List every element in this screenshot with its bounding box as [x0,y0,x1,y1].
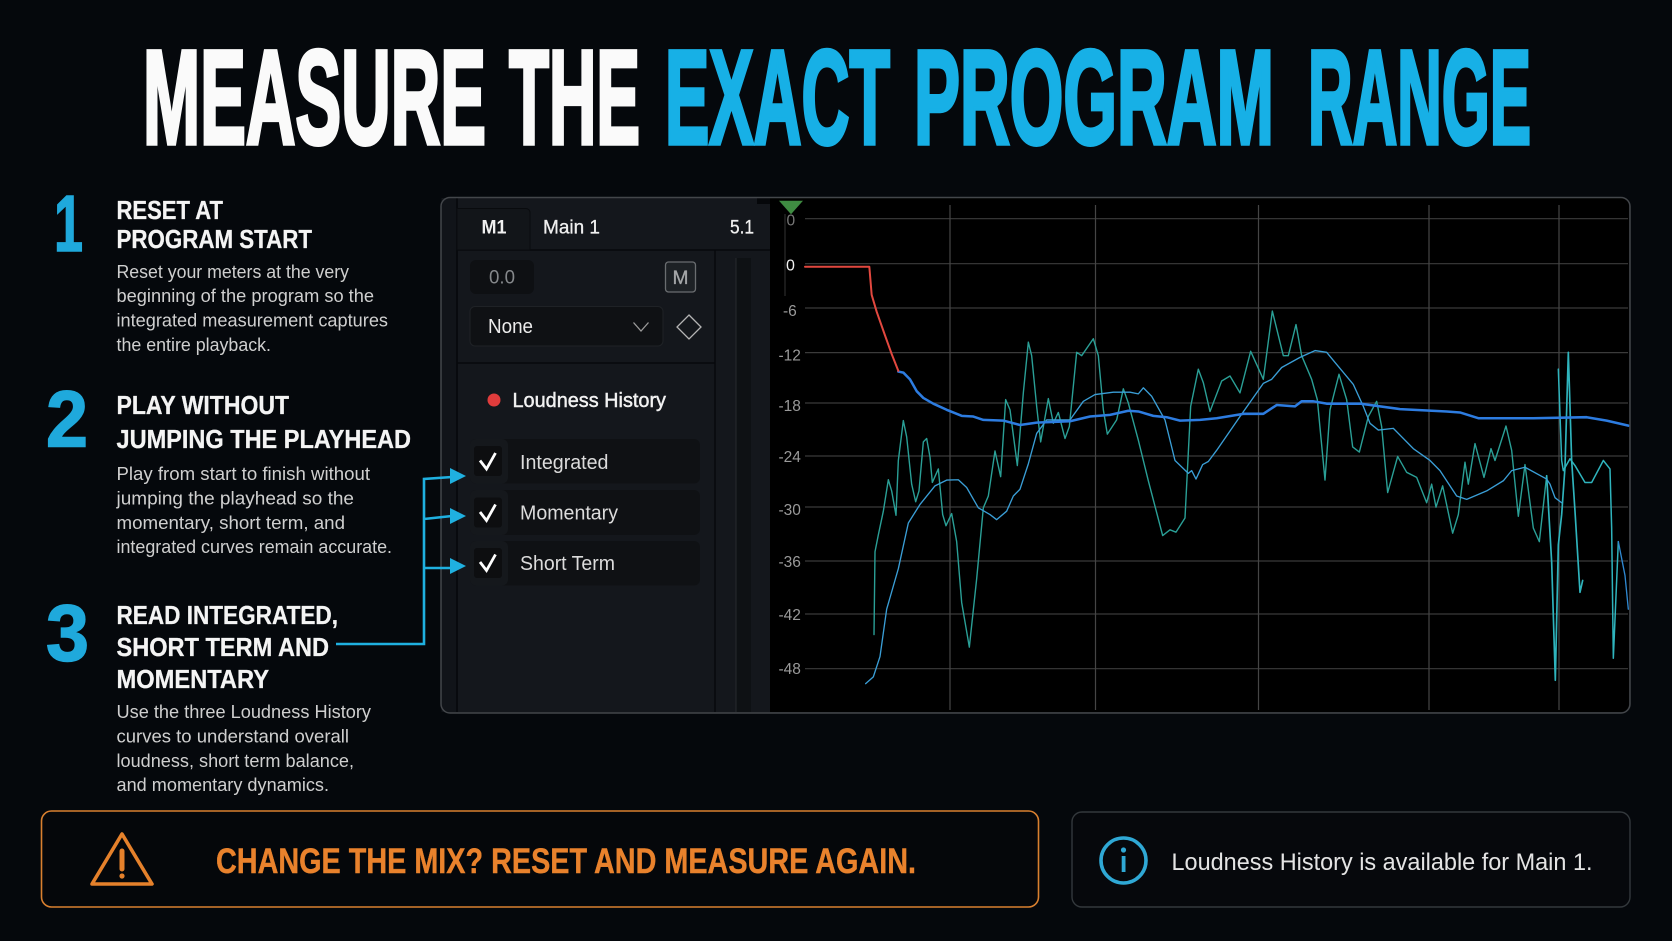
channel format: 5.1 [730,218,754,238]
short term curve [866,351,1562,684]
checkbox: Short Term [470,541,700,586]
step 3 body: loudness, short term balance, [116,751,354,771]
title [143,24,1531,172]
number 1: 1 [54,179,83,268]
step 2 body [115,464,392,557]
step 2 body: Play from start to finish without [116,464,370,484]
checkbox: Short Term: Short Term [520,553,615,575]
step 3 body [116,702,371,795]
warning text: CHANGE THE MIX? RESET AND MEASURE AGAIN. [216,842,916,881]
axis labels: 0 [786,212,796,230]
icon: playhead marker [779,201,803,214]
preset dropdown [470,306,663,346]
step 1 heading: PROGRAM START [116,224,312,254]
step 2: play without jumping [46,374,411,557]
loudness history header: Loudness History [512,390,666,412]
arrows: step 3 to checkboxes [336,468,466,644]
red pre-start segment [805,267,898,371]
step 1 body: integrated measurement captures [116,310,388,330]
curves [805,267,1628,684]
axis labels: -48 [778,661,801,678]
checkbox: Integrated: Integrated [520,452,608,474]
checkbox: Integrated [470,439,700,484]
step 2 body: integrated curves remain accurate. [116,537,392,557]
callout: change the mix warning [42,811,1038,907]
step 2 heading: PLAY WITHOUT [116,390,289,420]
step 3 heading [116,600,338,694]
axis labels: -36 [778,554,801,571]
title: PROGRAM [914,24,1274,172]
preset dropdown: None [488,316,533,338]
step 1 body: the entire playback. [116,335,271,355]
axis labels: -42 [778,607,801,624]
step 3 heading: READ INTEGRATED, [116,600,338,630]
step 1 body: beginning of the program so the [116,286,374,306]
callout: availability note [1072,812,1630,907]
step 2 heading [116,390,411,454]
step 1 body: Reset your meters at the very [116,262,349,282]
number 3: 3 [46,588,89,678]
title: MEASURE [143,24,486,172]
checkbox: Momentary [470,490,700,535]
step 3 heading: SHORT TERM AND [116,632,329,662]
sidebar [442,198,771,712]
note text: Loudness History is available for Main 1. [1172,849,1592,876]
step 1 heading: RESET AT [116,195,223,225]
tab: M1 [457,208,530,250]
level readout [470,260,534,294]
step 1 heading [116,195,312,254]
step 3 heading: MOMENTARY [116,664,269,694]
channel name: Main 1 [543,218,600,238]
axis labels: -6 [783,303,797,320]
title: EXACT [665,24,890,172]
step 1: reset at program start [54,179,388,355]
step 2 body: jumping the playhead so the [115,488,354,508]
icon: warning triangle [92,834,152,884]
axis labels: -30 [778,502,801,519]
M button [666,262,696,292]
step 1 body [116,262,388,355]
step 3 body: curves to understand overall [116,726,349,746]
axis labels [778,212,801,678]
axis labels: -12 [778,348,801,364]
icon: diamond [677,315,701,339]
M button: M [672,268,688,289]
icon: info [1101,838,1146,883]
axis labels: -18 [778,398,801,415]
checkbox: Momentary: Momentary [520,502,618,524]
chart: loudness history graph [757,198,1629,712]
step 3 body: and momentary dynamics. [116,775,329,795]
integrated curve [898,372,1628,426]
step 2 body: momentary, short term, and [116,513,345,533]
tab: M1: M1 [482,218,507,238]
panel: meter sidebar and graph [441,198,1630,713]
momentary curve [874,311,1618,680]
axis labels: 0 [786,258,795,274]
step 3 body: Use the three Loudness History [116,702,371,722]
step 3: read integrated, short term and momentary [46,588,371,795]
step 2 heading: JUMPING THE PLAYHEAD [116,424,411,454]
number 2: 2 [46,374,88,464]
title: THE [509,24,640,172]
axis labels: -24 [778,449,801,466]
level readout: 0.0 [489,268,515,288]
